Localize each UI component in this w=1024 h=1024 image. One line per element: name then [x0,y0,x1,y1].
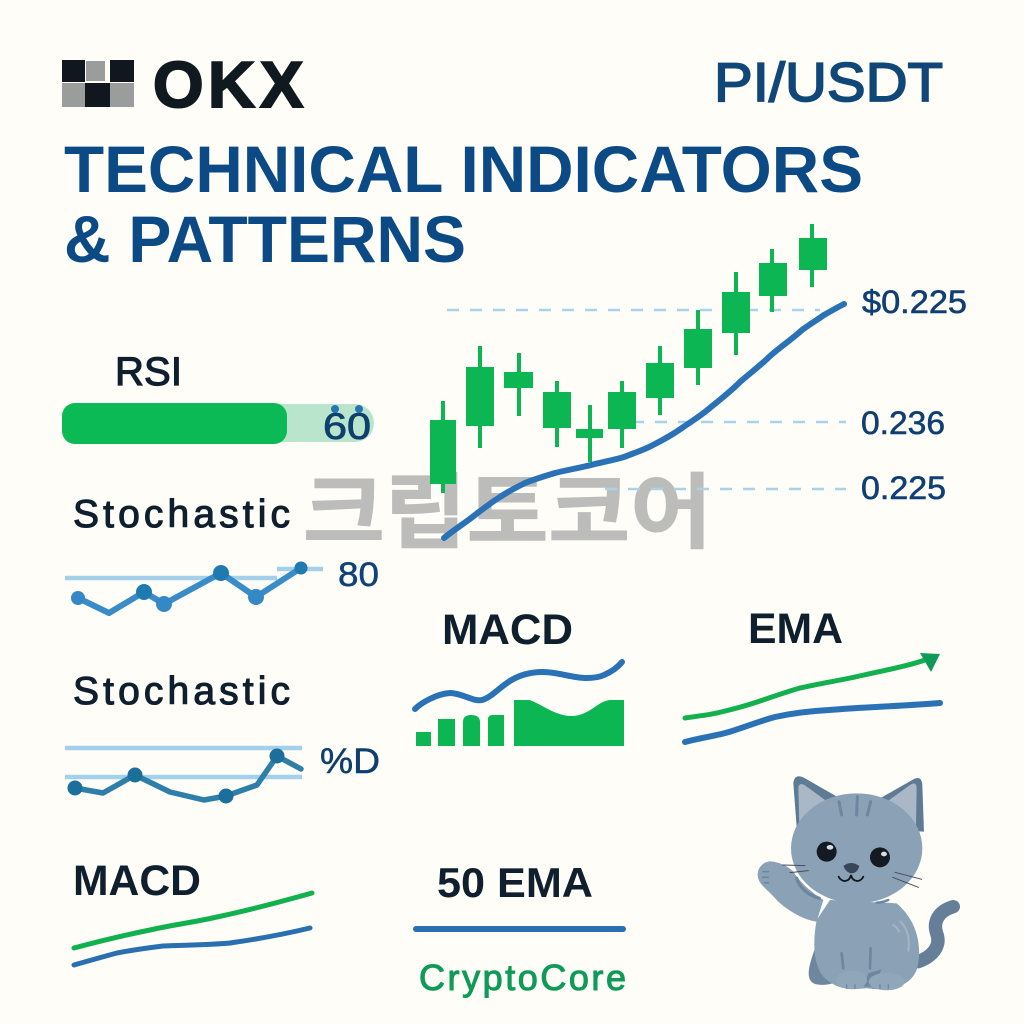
title [64,132,863,276]
arrow head [920,653,940,672]
brand: CryptoCore: CryptoCore [419,957,626,998]
green line [685,660,925,718]
price labels: 0.236 [861,405,945,441]
candlesticks [430,224,827,493]
price labels: 0.225 [861,470,946,506]
price labels [861,284,967,506]
EMA curve [444,304,844,538]
heading: MACD [73,857,201,905]
heading: Stochastic [73,670,290,713]
blue line [685,703,940,742]
panel: MACD histogram [415,606,624,746]
line chart [68,748,301,804]
icon: OKX checker mark [62,60,134,107]
value: 80 [338,556,379,594]
heading: MACD [442,606,573,654]
watermark: 크립토코어 [303,446,712,565]
MACD curve [415,662,622,709]
RSI value markers [331,405,363,413]
heading: EMA [748,605,843,653]
logo: OKX [62,48,303,121]
pair label: PI/USDT [714,51,943,113]
label: %D [320,742,380,781]
histogram [416,700,624,746]
chart: candlesticks with EMA and price levels [430,224,967,538]
line [416,926,623,932]
RSI fill [62,403,287,444]
panel: Stochastic 80 [65,493,379,613]
title: TECHNICAL INDICATORS [64,132,863,206]
heading: 50 EMA [437,859,593,906]
price labels: $0.225 [862,284,967,320]
RSI value: 60 [323,406,371,447]
RSI heading: RSI [115,350,182,394]
blue line [74,928,310,965]
panel: Stochastic %D [65,670,380,804]
green line [74,893,312,948]
threshold line [65,569,323,578]
logo wordmark: OKX [153,48,303,121]
panel: MACD lines [73,857,312,965]
threshold lines [65,748,302,777]
RSI track [240,404,374,442]
price level lines [447,310,846,489]
icon: waving grey kitten [758,776,953,990]
line chart [71,562,308,613]
panel: RSI [62,350,374,447]
heading: Stochastic [73,493,290,536]
panel: EMA [685,605,940,742]
title: & PATTERNS [64,202,466,276]
